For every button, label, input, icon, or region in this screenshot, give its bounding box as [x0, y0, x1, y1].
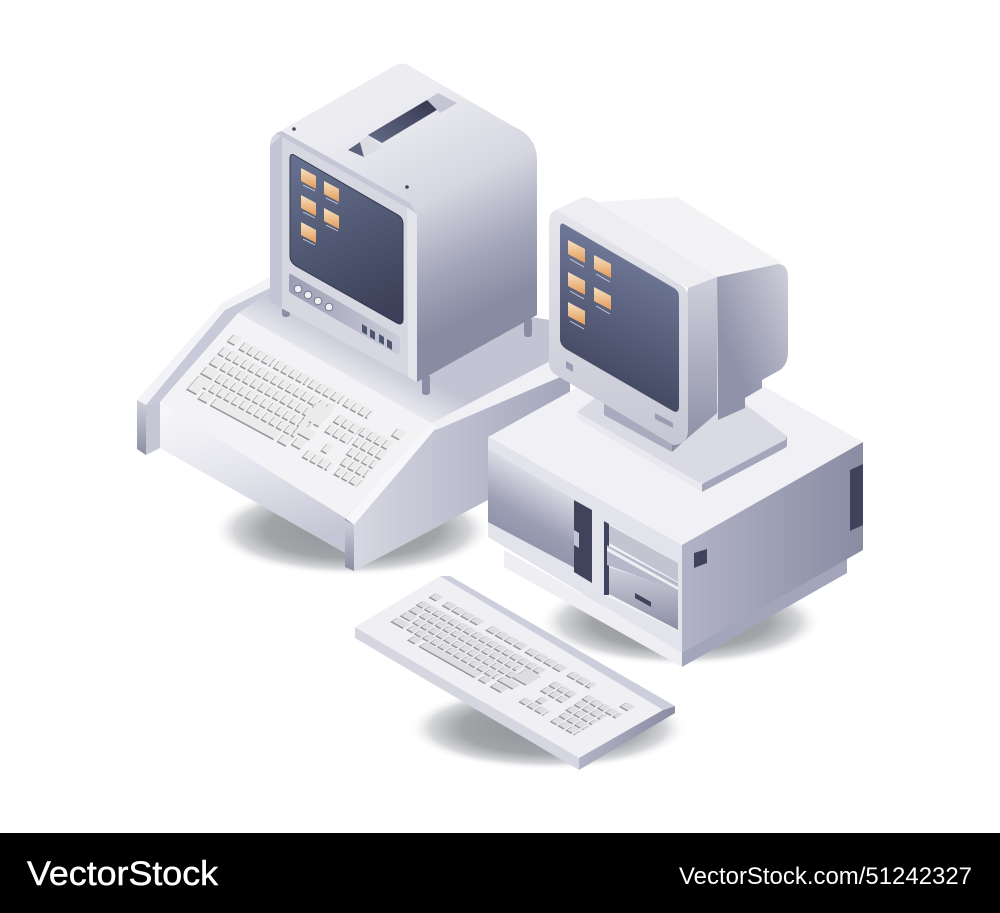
watermark bar	[0, 833, 1000, 913]
folder icons	[301, 168, 339, 245]
case port square	[694, 549, 707, 568]
monitor screen	[290, 154, 403, 324]
CRT back top	[597, 197, 782, 277]
console right rim	[345, 424, 436, 525]
monitor side	[408, 125, 537, 382]
drive bay	[604, 521, 678, 631]
case left panel	[488, 449, 575, 568]
CRT badges	[566, 361, 573, 372]
shadow: desktop computer	[538, 578, 822, 666]
desktop computer case	[488, 335, 863, 667]
case front	[488, 437, 682, 653]
shadow: keyboard	[408, 686, 688, 770]
keyboard keys	[384, 595, 634, 738]
bottom keyboard	[355, 576, 675, 770]
CRT back housing	[717, 264, 788, 420]
monitor front top bevel	[276, 131, 417, 214]
CRT neck	[604, 403, 672, 452]
shadow: console	[212, 484, 492, 576]
CRT top bevel	[552, 197, 717, 288]
monitor front left strip	[270, 135, 282, 308]
console left end	[137, 400, 146, 455]
monitor knobs	[294, 285, 333, 311]
keyboard front edge	[355, 627, 579, 770]
case plinth	[504, 550, 682, 667]
console platform	[238, 280, 570, 424]
console right wall	[354, 372, 570, 571]
case door slot	[574, 500, 592, 583]
image url: VectorStock.com/51242327	[679, 863, 972, 890]
monitor buttons	[362, 324, 392, 350]
monitor legs	[282, 300, 532, 395]
monitor handle	[292, 93, 457, 189]
monitor control strip	[289, 274, 400, 355]
CRT front side	[672, 277, 717, 452]
case right side	[682, 442, 863, 653]
keyboard back band	[440, 576, 675, 710]
monitor front frame	[270, 131, 417, 382]
folder icons	[568, 240, 611, 329]
monitor front right strip	[407, 207, 417, 382]
CRT front bezel	[549, 210, 688, 445]
CRT stand plate	[577, 398, 787, 483]
CRT monitor	[549, 197, 788, 492]
console with built-in keyboard	[137, 277, 572, 571]
CRT stand plate edge	[577, 412, 787, 492]
keyboard right edge	[579, 706, 675, 770]
console platform edge	[432, 358, 572, 430]
boxy monitor	[270, 64, 537, 395]
console right end strip	[345, 520, 354, 571]
keyboard top face	[355, 576, 663, 758]
case vent	[850, 464, 863, 531]
CRT screen	[560, 224, 679, 412]
console front panel	[160, 402, 345, 553]
monitor top	[282, 64, 534, 212]
case top	[488, 335, 863, 545]
console left slanted rim	[137, 277, 270, 405]
brand name: VectorStock	[27, 855, 219, 893]
console keyboard deck	[160, 313, 432, 518]
console keys	[185, 337, 407, 484]
